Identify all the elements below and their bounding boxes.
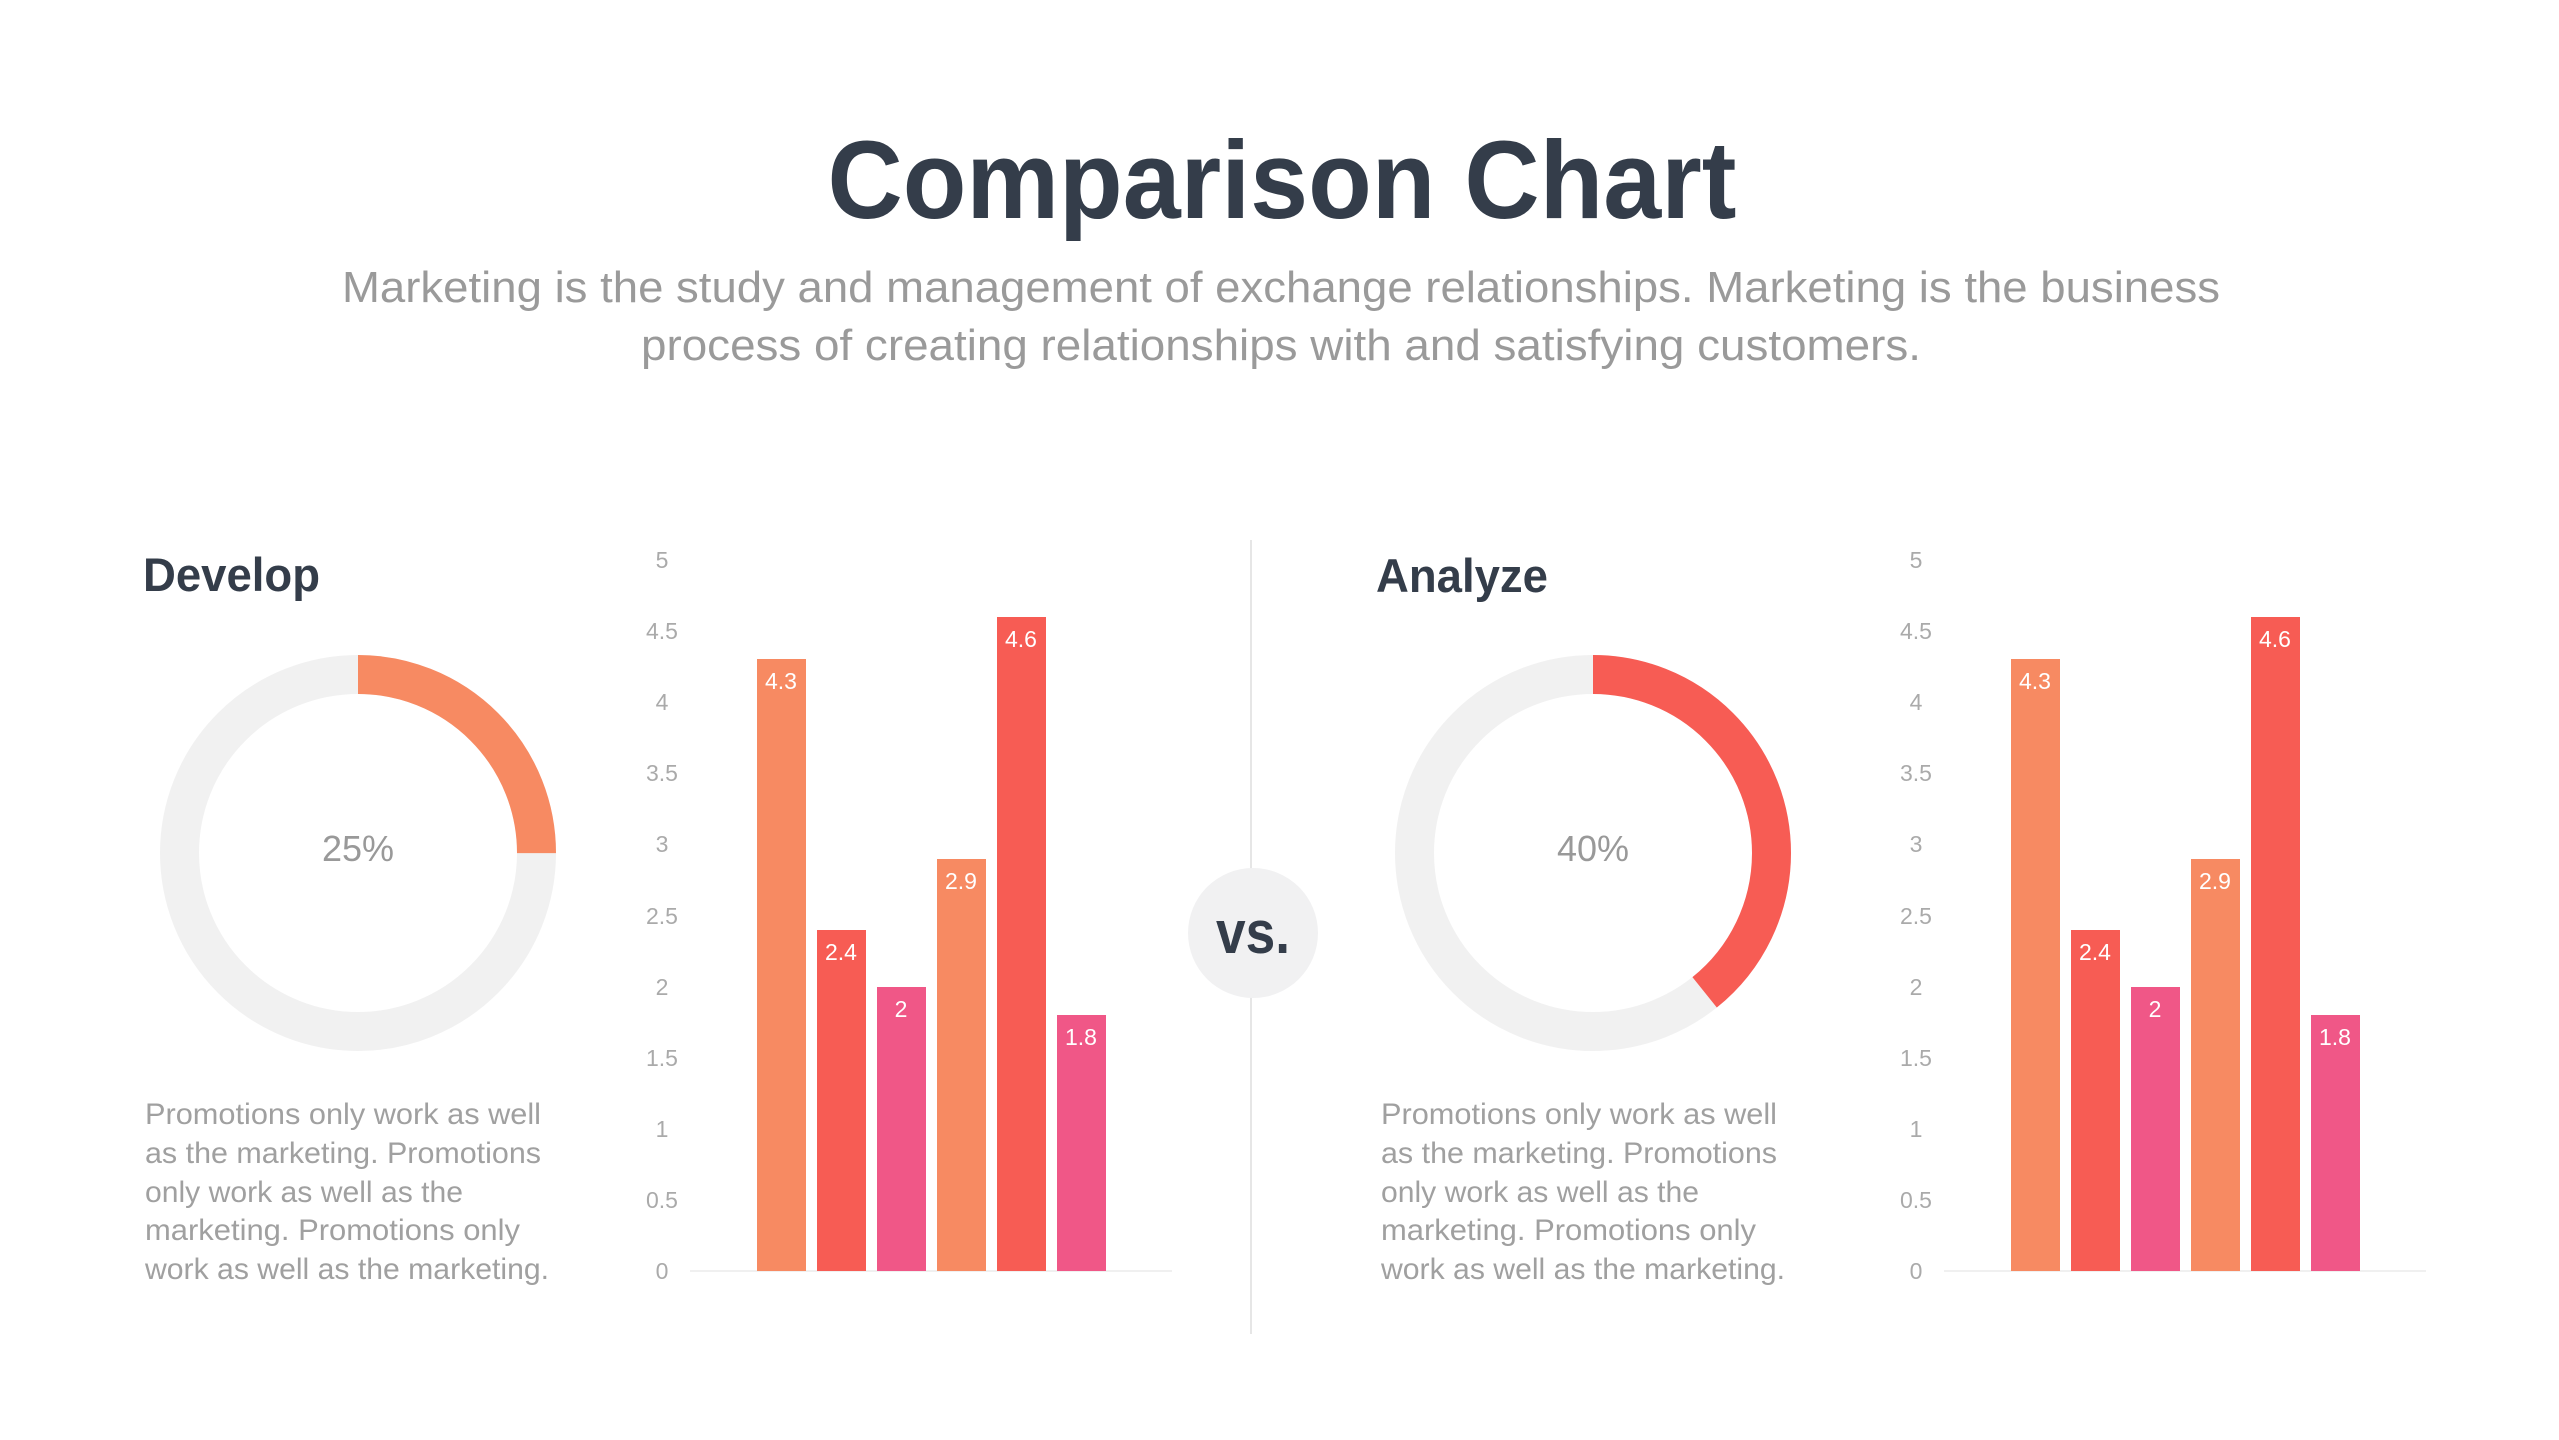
bar chart: develop: 2.5 [646, 903, 678, 929]
bar chart: develop: 5 [656, 547, 668, 573]
bar chart: develop: 1.5 [646, 1045, 678, 1071]
bar chart: analyze: 0.5 [1900, 1187, 1932, 1213]
subtitle [342, 263, 2220, 370]
paragraph: as the marketing. Promotions [145, 1137, 541, 1170]
bar chart: analyze: 3.5 [1900, 760, 1932, 786]
bar chart: develop: 0 [656, 1258, 668, 1284]
divider [1250, 540, 1252, 1334]
bar chart: analyze: 2 [1910, 974, 1922, 1000]
bar chart: analyze: 0 [1910, 1258, 1922, 1284]
bar chart: develop: 2.9 [945, 868, 977, 894]
donut 40% [1414, 674, 1772, 1032]
bar chart: analyze [1900, 547, 2426, 1284]
vs badge: vs. [1216, 899, 1290, 966]
paragraph: only work as well as the [1381, 1176, 1699, 1209]
bar chart: develop: 4.5 [646, 618, 678, 644]
bar chart: develop: 3 [656, 831, 668, 857]
bar chart: develop: 3.5 [646, 760, 678, 786]
paragraph: marketing. Promotions only [1381, 1214, 1756, 1247]
subtitle: Marketing is the study and management of exchange relationships. Marketing is the business [342, 263, 2220, 312]
paragraph [1380, 1098, 1785, 1286]
heading: develop: Develop [143, 548, 320, 601]
panel: develop [143, 547, 1172, 1286]
bar chart: develop: 2 [895, 996, 907, 1022]
bar chart: analyze: 1.8 [2319, 1024, 2351, 1050]
donut 25%: 25% [322, 828, 394, 869]
paragraph: Promotions only work as well [1381, 1098, 1777, 1131]
bar chart: analyze: 2.4 [2079, 939, 2111, 965]
bar chart: develop: 4.6 [1005, 626, 1037, 652]
bar chart: develop: 1.8 [1065, 1024, 1097, 1050]
vs badge [1188, 868, 1318, 998]
bar chart: analyze: 3 [1910, 831, 1922, 857]
bar chart: develop: 2 [656, 974, 668, 1000]
bar chart: analyze: 5 [1910, 547, 1922, 573]
panel: analyze [1376, 547, 2426, 1286]
bar chart: analyze: 2 [2149, 996, 2161, 1022]
bar chart: develop [646, 547, 1172, 1284]
title: Comparison Chart [828, 119, 1736, 242]
bar chart: develop: 4.3 [765, 668, 797, 694]
paragraph: work as well as the marketing. [1380, 1253, 1785, 1286]
bar chart: analyze: 2.9 [2199, 868, 2231, 894]
donut 40%: 40% [1557, 828, 1629, 869]
bar chart: develop: 0.5 [646, 1187, 678, 1213]
donut 25% [180, 674, 536, 1032]
paragraph [144, 1098, 549, 1286]
bar chart: develop: 2.4 [825, 939, 857, 965]
bar chart: analyze: 4 [1910, 689, 1923, 715]
paragraph: work as well as the marketing. [144, 1253, 549, 1286]
bar chart: develop: 1 [656, 1116, 668, 1142]
paragraph: as the marketing. Promotions [1381, 1137, 1777, 1170]
heading: analyze: Analyze [1376, 549, 1548, 602]
bar chart: analyze: 4.5 [1900, 618, 1932, 644]
bar chart: analyze: 2.5 [1900, 903, 1932, 929]
subtitle: process of creating relationships with and satisfying customers. [641, 321, 1921, 370]
paragraph: Promotions only work as well [145, 1098, 541, 1131]
paragraph: only work as well as the [145, 1176, 463, 1209]
bar chart: analyze: 4.6 [2259, 626, 2291, 652]
bar chart: develop: 4 [656, 689, 669, 715]
bar chart: analyze: 1.5 [1900, 1045, 1932, 1071]
bar chart: analyze: 1 [1910, 1116, 1922, 1142]
paragraph: marketing. Promotions only [145, 1214, 520, 1247]
bar chart: analyze: 4.3 [2019, 668, 2051, 694]
